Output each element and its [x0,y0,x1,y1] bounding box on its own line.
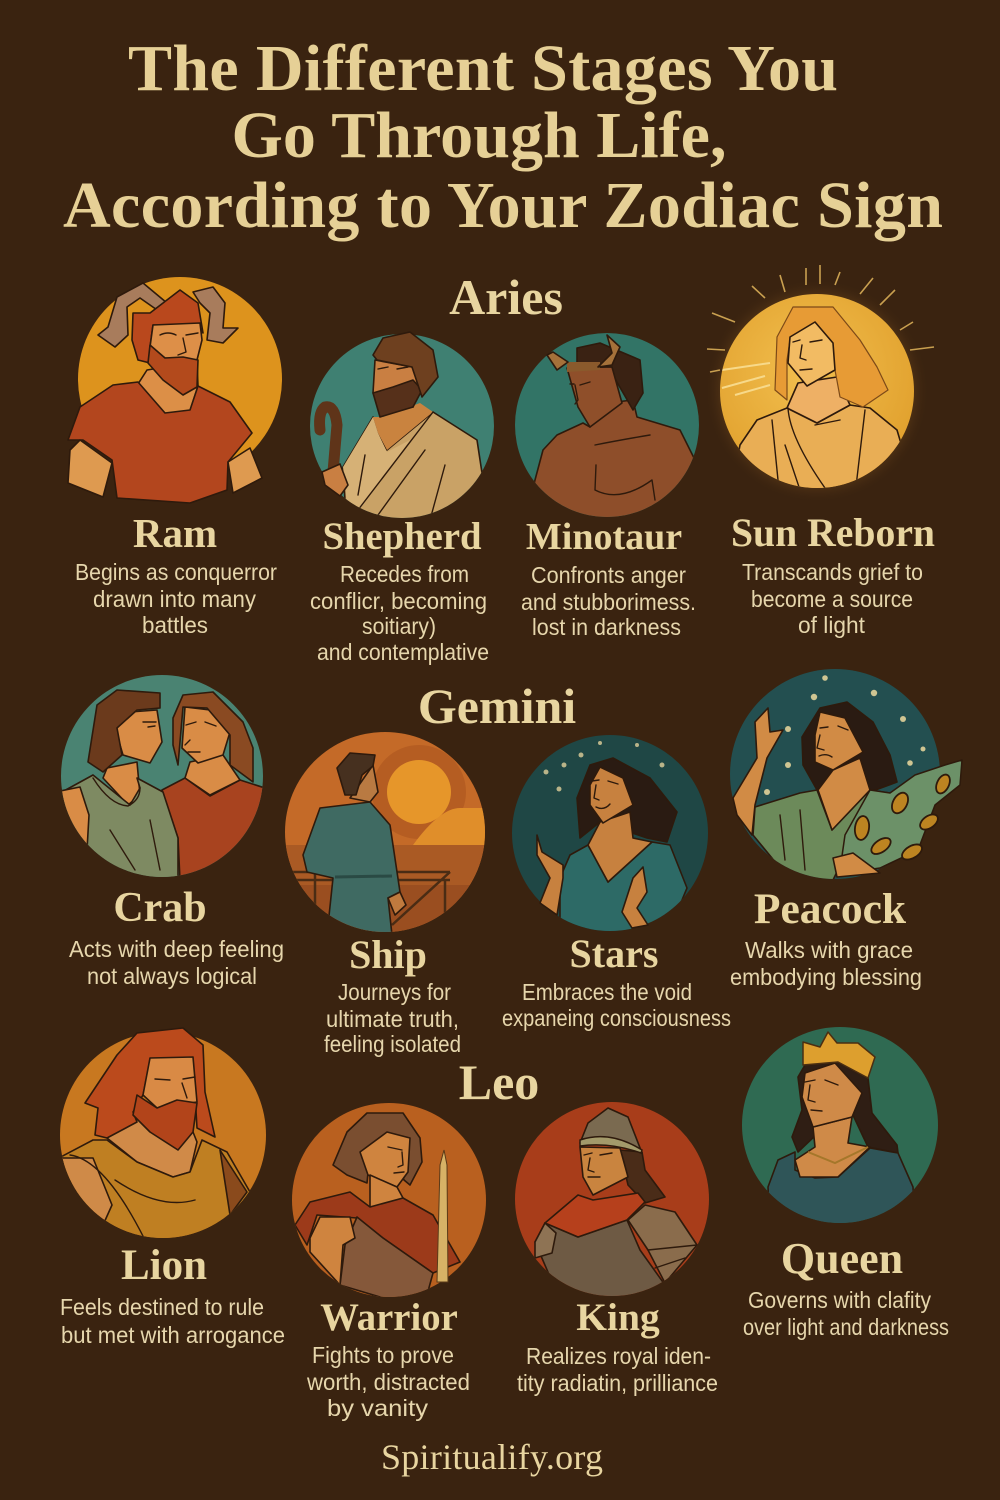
title: Go Through Life, [232,99,726,172]
name: Lion [121,1242,207,1289]
description: battles [142,612,208,638]
name: Queen [781,1234,903,1283]
name: King [576,1295,660,1339]
description [502,979,731,1031]
description [60,1294,285,1348]
description: ultimate truth, [326,1006,459,1032]
icon: shepherd portrait [310,332,494,530]
panel: Crab [55,675,284,989]
description: and contemplative [317,639,489,665]
panel: Sun Reborn [705,265,935,638]
description: Begins as conquerror [75,559,277,585]
description: lost in darkness [532,614,681,640]
description: become a source [751,586,913,612]
heading: Gemini: Gemini [418,678,576,734]
title [63,32,943,242]
icon: queen portrait [742,1027,938,1230]
description: Governs with clafity [748,1287,931,1313]
description: soitiary) [362,613,436,639]
description [324,979,461,1057]
name: Shepherd [322,516,482,558]
name: Warrior [320,1297,458,1339]
title: According to Your Zodiac Sign [63,169,943,242]
description: Journeys for [338,979,451,1005]
description [521,562,696,640]
panel: Warrior [292,1103,486,1421]
description [69,936,284,989]
description: Confronts anger [531,562,686,588]
icon: ram portrait [68,277,282,503]
icon: king portrait [515,1102,709,1300]
name: Ram [133,510,217,556]
description: Transcands grief to [742,559,923,585]
name: Crab [113,885,207,931]
description [742,559,923,638]
icon: lion portrait [55,1028,266,1245]
description: by vanity [327,1395,429,1421]
panel: Minotaur [515,333,700,640]
icon: crab twins portrait [55,675,265,880]
name: Ship [349,932,427,977]
description [743,1287,949,1340]
heading: Aries: Aries [449,269,563,325]
icon: stars portrait [512,735,708,935]
description: expaneing consciousness [502,1005,731,1031]
panel: Ship [280,732,490,1057]
name: Sun Reborn [731,511,935,555]
description: conflicr, becoming [310,588,487,614]
description: Fights to prove [312,1342,454,1368]
panel: Queen [742,1027,949,1340]
icon: peacock portrait [730,669,962,880]
name: Minotaur [526,516,682,558]
panel: Ram [68,277,282,638]
description: Acts with deep feeling [69,936,284,962]
description: embodying blessing [730,964,922,990]
panel: Shepherd [310,332,494,665]
description: Realizes royal iden- [526,1343,711,1369]
description: of light [798,612,866,638]
icon: minotaur portrait [515,333,700,525]
name: Stars [570,931,658,976]
icon: sun reborn portrait [705,265,934,503]
panel: Lion [55,1028,285,1348]
description: worth, distracted [306,1369,470,1395]
description: feeling isolated [324,1031,461,1057]
description: drawn into many [93,586,256,612]
description [310,561,489,665]
panel: Peacock [730,669,962,990]
description [517,1343,718,1396]
panel: Stars [502,735,731,1031]
description: but met with arrogance [61,1322,285,1348]
description: and stubborimess. [521,589,696,615]
title: The Different Stages You [128,32,838,105]
description [75,559,277,638]
panel: King [515,1102,718,1396]
description [306,1342,470,1421]
name: Peacock [754,885,907,933]
description: Embraces the void [522,979,692,1005]
description: not always logical [87,963,257,989]
description: Feels destined to rule [60,1294,264,1320]
description: over light and darkness [743,1314,949,1340]
description: Recedes from [340,561,469,587]
icon: ship portrait [280,732,490,935]
description: tity radiatin, prilliance [517,1370,718,1396]
description [730,937,922,990]
footer source: Spiritualify.org [381,1437,603,1477]
icon: warrior portrait [292,1103,486,1300]
heading: Leo: Leo [459,1054,539,1110]
description: Walks with grace [745,937,913,963]
